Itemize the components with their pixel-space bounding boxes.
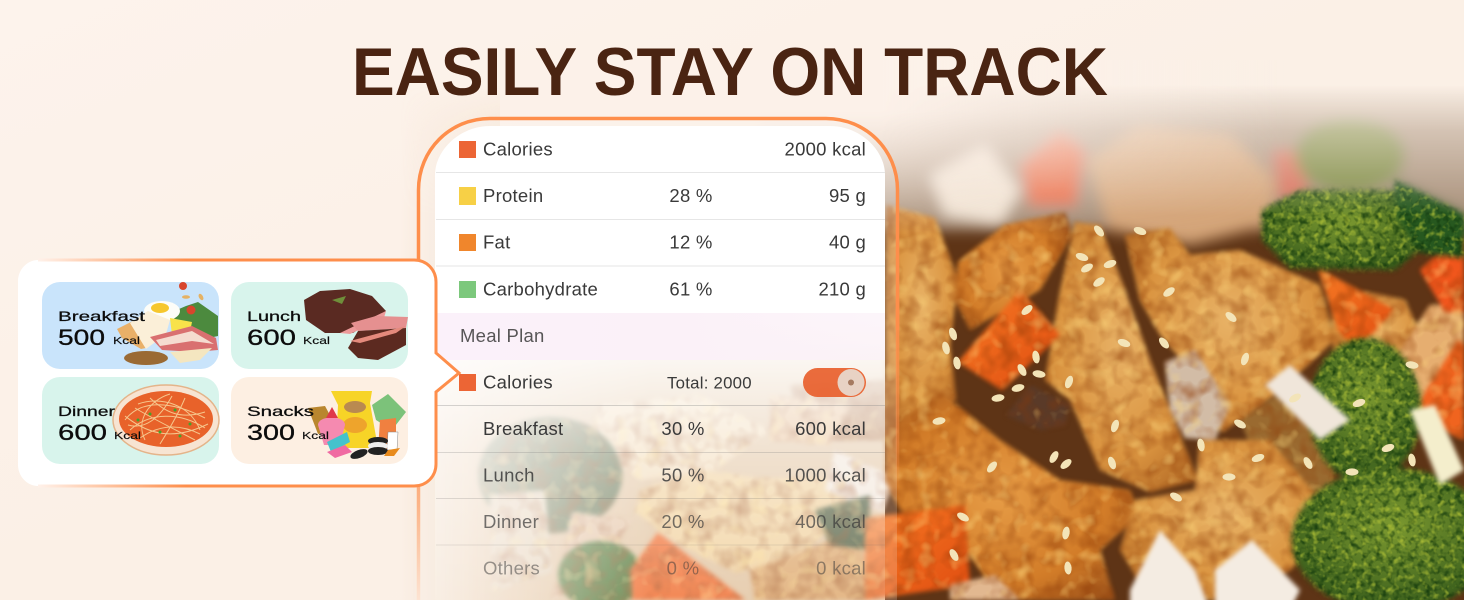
row: protein: 28 %: [669, 185, 713, 206]
row: others: 0 kcal: [816, 558, 866, 578]
value: 600 kcal: 600: [247, 325, 296, 350]
row: dinner: Dinner: [483, 511, 539, 532]
row dividers: [436, 172, 885, 545]
row: protein: Protein: [483, 185, 543, 206]
row: carbohydrate: 61 %: [669, 278, 713, 300]
row: carbohydrate: Carbohydrate: [483, 278, 598, 300]
white vegetable pieces: [1130, 365, 1464, 600]
label: breakfast: Breakfast: [58, 308, 145, 324]
heading: meal plan: Meal Plan: [460, 325, 545, 346]
row: breakfast: 30 %: [661, 418, 705, 439]
row: breakfast: 600 kcal: [795, 418, 866, 439]
label: dinner: Dinner: [58, 403, 115, 419]
row: lunch: 1000 kcal: [785, 464, 866, 486]
label: snacks: Snacks: [247, 403, 314, 419]
icon: breakfast plate: [117, 282, 218, 365]
row: calories total: Total: 2000: [667, 374, 752, 392]
row: dinner: 20 %: [661, 511, 705, 532]
row: others: [483, 558, 866, 578]
row: fat: 40 g: [829, 232, 866, 252]
sesame seeds: [932, 224, 1419, 575]
value: 500 kcal: 500: [58, 325, 105, 350]
row: fat: [459, 232, 866, 252]
row: dinner: 400 kcal: [795, 511, 866, 532]
value: 300 kcal: 300: [247, 420, 295, 445]
row: others: Others: [483, 558, 540, 578]
row: carbohydrate: 210 g: [818, 278, 866, 300]
row: fat: Fat: [483, 232, 510, 252]
icon: spaghetti plate: [113, 385, 219, 455]
row: calories total: [459, 372, 752, 392]
callout: daily meals: [18, 260, 459, 486]
toggle switch: [803, 368, 866, 397]
row: lunch: 50 %: [661, 464, 705, 486]
value: 600 kcal: [58, 420, 141, 445]
value: 500 kcal: [58, 325, 140, 350]
table background: [435, 126, 885, 600]
value: 600 kcal: Kcal: [114, 430, 141, 442]
row: breakfast: Breakfast: [483, 418, 563, 439]
value: 600 kcal: [247, 325, 330, 350]
value: 600 kcal: 600: [58, 420, 107, 445]
row: protein: [459, 185, 866, 206]
icon: broccoli florets: [1262, 180, 1464, 600]
section band: meal plan: [435, 313, 885, 360]
card: dinner: [42, 377, 219, 464]
panel: nutrition table: [418, 118, 898, 600]
row: calories: Calories: [483, 138, 553, 160]
card: lunch: [231, 282, 408, 369]
row: carbohydrate: [459, 278, 866, 300]
value: 600 kcal: Kcal: [303, 335, 330, 347]
icon: snacks pile: [308, 391, 406, 461]
row: others: 0 %: [667, 558, 699, 578]
row: fat: 12 %: [669, 232, 713, 252]
card: breakfast: [42, 282, 219, 369]
panel glass: [419, 120, 897, 600]
panel border right fading: [896, 300, 899, 500]
row: calories total: Calories: [483, 372, 553, 392]
callout box: [18, 260, 459, 486]
row: protein: 95 g: [829, 185, 866, 206]
icon: steak: [304, 289, 408, 360]
panel border left and top: [418, 118, 898, 600]
row: calories: [459, 138, 866, 160]
card: snacks: [231, 377, 408, 464]
row: lunch: [483, 464, 866, 486]
photo top-left fade: [500, 90, 1215, 229]
title: EASILY STAY ON TRACK: [352, 34, 1108, 110]
value: 500 kcal: Kcal: [113, 335, 140, 347]
label: lunch: Lunch: [247, 308, 301, 324]
food photograph: [428, 92, 1464, 600]
value: 300 kcal: Kcal: [302, 430, 329, 442]
row: breakfast: [483, 418, 866, 439]
value: 300 kcal: [247, 420, 329, 445]
row: lunch: Lunch: [483, 464, 535, 486]
row: calories: 2000 kcal: [785, 138, 866, 160]
row: dinner: [483, 511, 866, 532]
